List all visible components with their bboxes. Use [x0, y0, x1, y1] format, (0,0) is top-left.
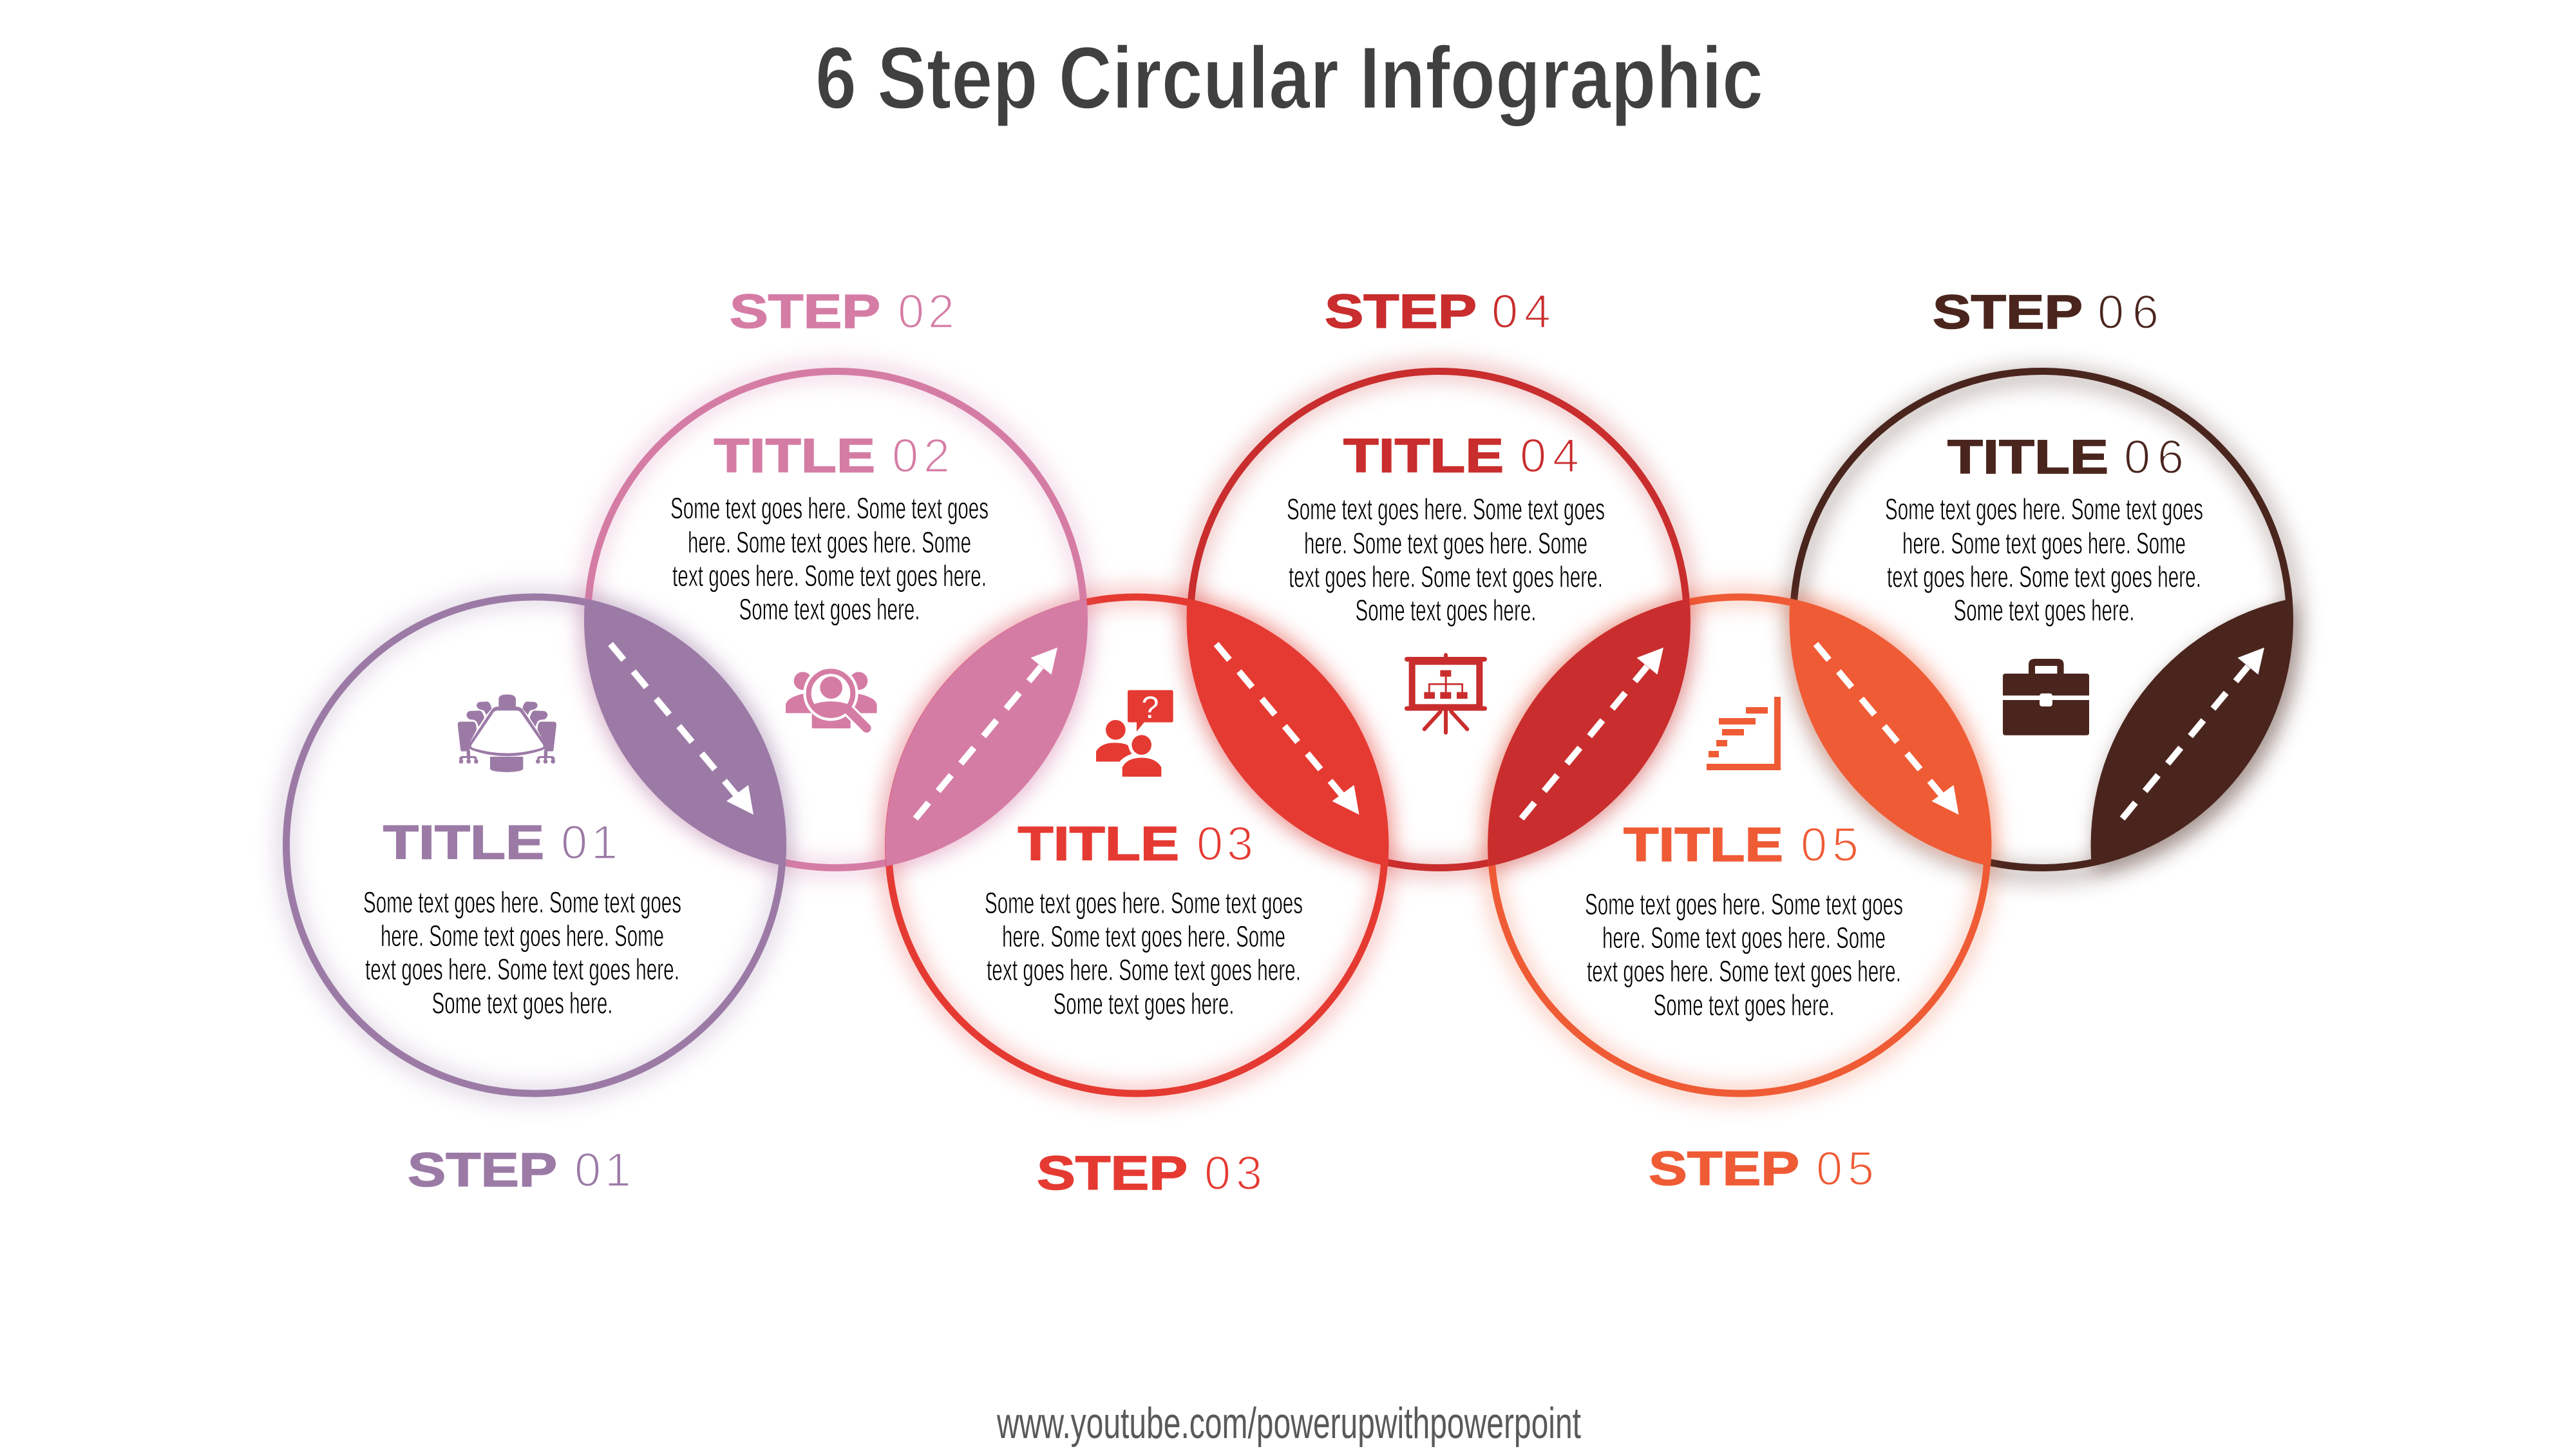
- body text 2: [670, 491, 989, 626]
- body text 3: text goes here. Some text goes here.: [987, 953, 1301, 987]
- leaf with arrow: step 5: [1790, 598, 1991, 866]
- step label 1: STEP: [408, 1143, 557, 1197]
- circle title 1: TITLE: [383, 815, 544, 869]
- body text 1: here. Some text goes here. Some: [381, 919, 664, 952]
- circle title 6: [1947, 430, 2184, 484]
- body text 2: text goes here. Some text goes here.: [672, 559, 987, 592]
- step label 6: [1933, 285, 2159, 339]
- arrow: step 6: [2123, 648, 2264, 819]
- ring: step 5: [1492, 597, 1987, 1094]
- body text 4: [1287, 492, 1605, 627]
- ring: step 4: [1190, 371, 1687, 868]
- body text 3: Some text goes here. Some text goes: [985, 886, 1303, 920]
- icon: people with question bubble: ?: [1141, 690, 1159, 725]
- circle glows: [285, 370, 2293, 1095]
- circle title 6: TITLE: [1947, 430, 2108, 484]
- body text 5: here. Some text goes here. Some: [1602, 921, 1886, 954]
- circle title 2: TITLE: [714, 429, 875, 482]
- circle title 6: 06: [2124, 430, 2184, 484]
- ring: step 6: [1793, 371, 2290, 868]
- step label 5: [1649, 1142, 1874, 1195]
- icon: briefcase: [2003, 659, 2089, 735]
- step label 2: 02: [898, 285, 954, 338]
- body text 6: Some text goes here. Some text goes: [1885, 492, 2203, 526]
- step label 6: 06: [2098, 285, 2159, 339]
- circle title 3: TITLE: [1018, 817, 1179, 871]
- body text 5: Some text goes here. Some text goes: [1585, 887, 1903, 921]
- icon: people with magnifier: [786, 666, 877, 728]
- body text 1: Some text goes here.: [431, 987, 613, 1020]
- step label 5: 05: [1816, 1142, 1874, 1195]
- circle title 5: TITLE: [1624, 818, 1783, 871]
- icon: conference table: [458, 694, 556, 772]
- ring: step 1: [286, 597, 783, 1094]
- arrow: step 5: [1816, 644, 1959, 815]
- circle title 4: [1343, 429, 1579, 482]
- leaf with arrow: step 4: [1488, 598, 1690, 866]
- step label 6: STEP: [1933, 285, 2083, 339]
- circle title 3: 03: [1197, 817, 1253, 871]
- body text 5: [1585, 887, 1903, 1021]
- body text 6: here. Some text goes here. Some: [1902, 527, 2186, 560]
- body text 1: text goes here. Some text goes here.: [365, 952, 679, 986]
- circle title 2: 02: [892, 429, 950, 482]
- title: 6 Step Circular Infographic: [815, 29, 1763, 128]
- body text 1: [363, 886, 681, 1020]
- icon: people with question bubble: [1096, 690, 1173, 777]
- circle title 1: [383, 815, 618, 869]
- step label 2: STEP: [730, 285, 880, 338]
- body text 2: Some text goes here. Some text goes: [670, 491, 989, 525]
- arrow: step 2: [916, 648, 1057, 819]
- arrow: step 1: [611, 644, 753, 815]
- circle title 4: TITLE: [1343, 429, 1504, 482]
- body text 4: text goes here. Some text goes here.: [1289, 560, 1603, 594]
- arrow: step 4: [1521, 648, 1663, 819]
- step label 3: [1037, 1146, 1262, 1200]
- body text 5: Some text goes here.: [1654, 988, 1834, 1021]
- circle title 4: 04: [1520, 429, 1579, 482]
- body text 2: Some text goes here.: [739, 592, 920, 626]
- step label 5: STEP: [1649, 1142, 1799, 1195]
- body text 4: Some text goes here.: [1355, 594, 1537, 627]
- step label 4: [1325, 285, 1551, 338]
- icon: presentation board: [1405, 653, 1487, 733]
- ring: step 3: [889, 597, 1385, 1094]
- body text 5: text goes here. Some text goes here.: [1587, 954, 1901, 988]
- body text 1: Some text goes here. Some text goes: [363, 886, 681, 919]
- footer url: www.youtube.com/powerupwithpowerpoint: [996, 1399, 1581, 1448]
- step label 3: 03: [1204, 1146, 1262, 1200]
- body text 6: [1885, 492, 2203, 627]
- step label 1: 01: [574, 1143, 631, 1197]
- circle title 5: 05: [1801, 818, 1859, 871]
- ring: step 2: [587, 371, 1084, 868]
- body text 3: Some text goes here.: [1054, 987, 1234, 1020]
- step label 4: STEP: [1325, 285, 1477, 338]
- leaf with arrow: step 3: [1187, 598, 1388, 866]
- leaf with arrow: step 1: [584, 598, 786, 866]
- circle title 2: [714, 429, 950, 482]
- step label 3: STEP: [1037, 1146, 1188, 1200]
- icon: stairs chart: [1707, 697, 1781, 770]
- leaf with arrow: step 6: [2091, 598, 2293, 866]
- circle title 3: [1018, 817, 1253, 871]
- circle title 5: [1624, 818, 1859, 871]
- circle title 1: 01: [561, 815, 618, 869]
- body text 4: here. Some text goes here. Some: [1304, 527, 1587, 560]
- leaf with arrow: step 2: [886, 598, 1087, 866]
- body text 2: here. Some text goes here. Some: [688, 526, 971, 559]
- body text 6: Some text goes here.: [1954, 594, 2134, 627]
- step label 2: [730, 285, 954, 338]
- step label 4: 04: [1492, 285, 1551, 338]
- body text 3: here. Some text goes here. Some: [1002, 920, 1285, 953]
- arrow: step 3: [1216, 644, 1359, 815]
- step label 1: [408, 1143, 631, 1197]
- body text 6: text goes here. Some text goes here.: [1887, 560, 2201, 594]
- body text 4: Some text goes here. Some text goes: [1287, 492, 1605, 526]
- body text 3: [985, 886, 1303, 1020]
